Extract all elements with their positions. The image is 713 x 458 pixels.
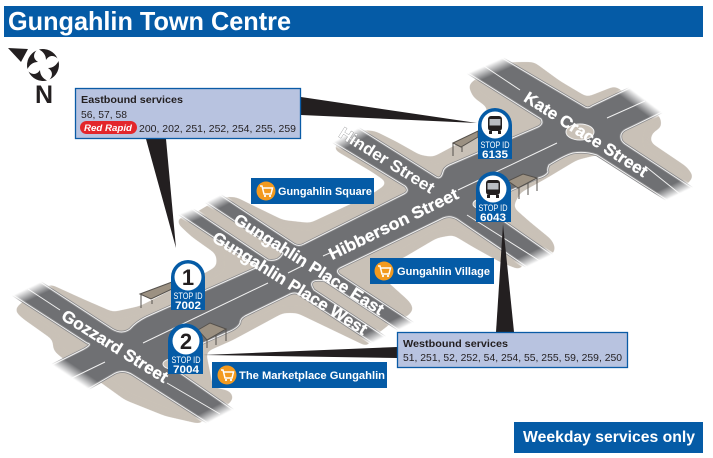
label: The Marketplace Gungahlin bbox=[212, 362, 387, 388]
icon: bus bbox=[488, 116, 502, 134]
street map bbox=[7, 52, 698, 427]
heading: Westbound services bbox=[403, 338, 508, 350]
stop 7002: STOP ID bbox=[174, 291, 203, 301]
icon: Red Rapid pill: Red Rapid bbox=[84, 123, 133, 133]
stop 6043: STOP ID bbox=[478, 203, 508, 213]
shelter: stop 7004 bbox=[198, 323, 226, 348]
street: Hibberson Street: Hibberson Street bbox=[326, 185, 462, 264]
road centre lines bbox=[28, 66, 680, 414]
stop 6135 bbox=[478, 108, 512, 161]
rapid route list: 200, 202, 251, 252, 254, 255, 259 bbox=[139, 123, 296, 135]
icon: north compass: N bbox=[35, 81, 53, 109]
stop 6043 bbox=[476, 172, 511, 224]
stop 7004: STOP ID bbox=[172, 355, 201, 365]
icon: bus bbox=[486, 180, 500, 198]
street: Hinder Street: Hinder Street bbox=[336, 124, 438, 198]
stop 6043: 6043 bbox=[480, 212, 506, 224]
route list: 56, 57, 58 bbox=[81, 109, 127, 121]
stop 7002 bbox=[171, 260, 205, 312]
label: Gungahlin Village: Gungahlin Village bbox=[397, 266, 490, 278]
note: weekday services only: Weekday services only bbox=[523, 429, 695, 446]
icon: Red Rapid pill bbox=[80, 121, 137, 134]
stop 6135: STOP ID bbox=[480, 140, 510, 150]
shelter: stop 6135 bbox=[453, 131, 478, 156]
label: Gungahlin Square: Gungahlin Square bbox=[278, 186, 372, 198]
route list: 51, 251, 52, 252, 54, 254, 55, 255, 59, 259, 250 bbox=[403, 352, 622, 364]
shelter: stop 6043 bbox=[508, 174, 537, 199]
label: The Marketplace Gungahlin: The Marketplace Gungahlin bbox=[239, 370, 385, 382]
street: Gungahlin Place East: Gungahlin Place East bbox=[230, 211, 387, 319]
street names bbox=[58, 89, 651, 387]
stop 7004: 2 bbox=[180, 329, 192, 354]
panel: eastbound services bbox=[76, 88, 300, 138]
road kerb lines bbox=[13, 58, 692, 423]
stop 7002: 7002 bbox=[175, 300, 201, 312]
road network bbox=[13, 58, 692, 423]
stop 7004 bbox=[168, 324, 203, 376]
kerb islands bbox=[163, 198, 501, 369]
title bbox=[4, 6, 703, 37]
heading: Eastbound services bbox=[81, 94, 183, 106]
road end fades bbox=[7, 52, 698, 427]
label: Gungahlin Square bbox=[251, 178, 374, 204]
note: weekday services only bbox=[514, 422, 703, 453]
icon: north compass bbox=[8, 48, 59, 109]
panel: westbound services bbox=[398, 332, 628, 368]
stop 7004: 7004 bbox=[173, 364, 200, 376]
stop 7002: 1 bbox=[182, 265, 194, 290]
stop 6135: 6135 bbox=[482, 149, 508, 161]
label: Gungahlin Village bbox=[370, 258, 494, 284]
roundabout island bbox=[566, 124, 594, 140]
title: Gungahlin Town Centre bbox=[8, 6, 291, 36]
street: Gozzard Street: Gozzard Street bbox=[58, 307, 172, 387]
street: Gungahlin Place West: Gungahlin Place West bbox=[209, 229, 371, 339]
street: Kate Crace Street: Kate Crace Street bbox=[521, 89, 651, 181]
verge land bbox=[14, 62, 694, 424]
callout pointers bbox=[146, 97, 514, 358]
shelter: stop 7002 bbox=[140, 282, 172, 308]
